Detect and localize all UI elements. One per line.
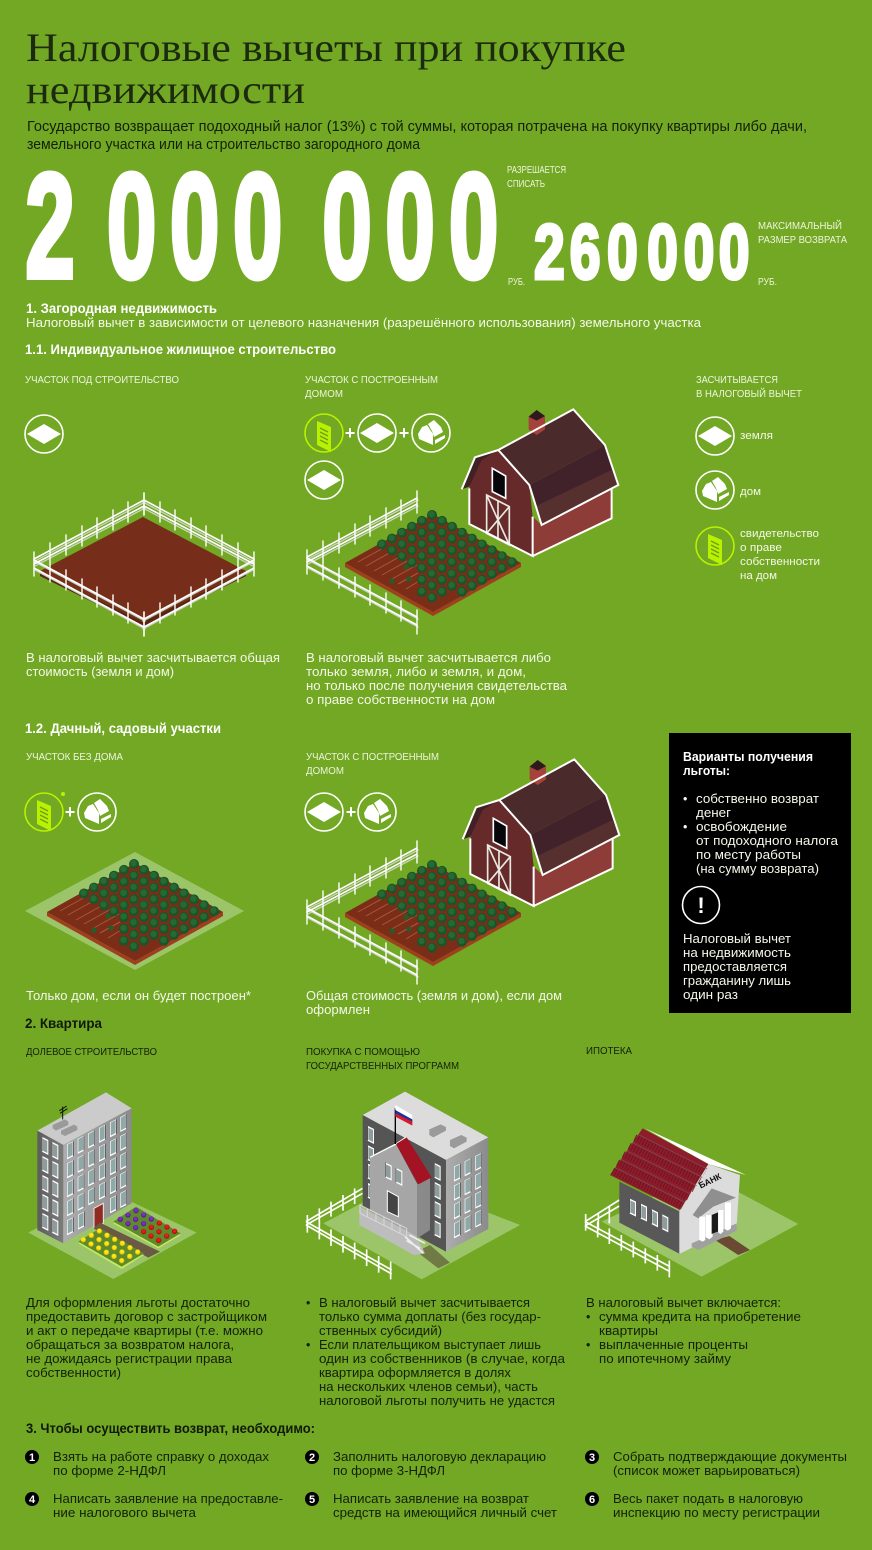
icons: document plus house (25, 792, 116, 831)
callout: benefit options: Налоговый вычет (683, 932, 791, 946)
intro text (27, 118, 807, 153)
text block: только сумма доплаты (без государ- (319, 1310, 541, 1324)
panel: dacha plot with built house: ДОМОМ (306, 766, 344, 777)
step 5: Написать заявление на возврат (333, 1492, 529, 1506)
step 4 (25, 1492, 283, 1520)
text block: но только после получения свидетельства (306, 679, 567, 693)
text block: выплаченные проценты (599, 1338, 748, 1352)
step 5: 5 (309, 1494, 315, 1506)
step 5: средств на имеющийся личный счет (333, 1506, 557, 1520)
text block: один из собственников (в случае, когда (319, 1352, 565, 1366)
big number: 260 000: РАЗМЕР ВОЗВРАТА (758, 235, 847, 246)
text block: Для оформления льготы достаточно (26, 1296, 250, 1310)
heading: section 3: 3. Чтобы осуществить возврат, необходимо: (26, 1420, 315, 1436)
text block (26, 1296, 267, 1380)
heading: section 1.2: 1.2. Дачный, садовый участки (25, 720, 221, 736)
panel: legend (696, 375, 820, 582)
text block (306, 651, 567, 707)
illustration: fenced empty plot (34, 493, 254, 636)
heading: section 1: 1. Загородная недвижимость (26, 300, 217, 316)
intro text: Государство возвращает подоходный налог (13%) с той суммы, которая потрачена на покупку квартиры либо дачи, (27, 118, 807, 135)
text block: квартиры (599, 1324, 658, 1338)
icons: document plus land plus house, or land: + (345, 423, 355, 443)
step 2: 2 (309, 1452, 315, 1464)
panel: legend: дом (740, 486, 761, 498)
step 1: по форме 2-НДФЛ (53, 1464, 166, 1478)
panel: mortgage: ИПОТЕКА (586, 1046, 632, 1057)
text block: обращаться за возвратом налога, (26, 1338, 234, 1352)
big number: 2 000 000: 2 000 000 (25, 144, 499, 310)
text block (306, 1296, 565, 1408)
text block: только земля, либо и земля, и дом, (306, 665, 526, 679)
text block: В налоговый вычет засчитывается (319, 1296, 530, 1310)
text block: • (586, 1338, 590, 1352)
text block (586, 1296, 801, 1366)
big number: 2 000 000: РАЗРЕШАЕТСЯ (507, 165, 566, 176)
panel: legend: свидетельство (740, 528, 819, 540)
big number: 260 000: 260 000 (534, 211, 749, 296)
panel: legend: В НАЛОГОВЫЙ ВЫЧЕТ (696, 387, 802, 400)
text block: стоимость (земля и дом) (26, 665, 174, 679)
illustration: government building with flag (306, 1092, 520, 1279)
text block: на нескольких членов семьи), часть (319, 1380, 538, 1394)
callout: benefit options: один раз (683, 988, 738, 1002)
panel: plot without a house (25, 752, 251, 1003)
text block: предоставить договор с застройщиком (26, 1310, 267, 1324)
icons: document plus land plus house, or land (305, 414, 450, 499)
step 6: Весь пакет подать в налоговую (613, 1492, 803, 1506)
panel: plot without a house: УЧАСТОК БЕЗ ДОМА (26, 752, 123, 763)
callout: benefit options: денег (696, 806, 731, 820)
step 1: Взять на работе справку о доходах (53, 1450, 270, 1464)
heading: section 1: Налоговый вычет в зависимости от целевого назначения (разрешённого использования) земельного участка (26, 316, 701, 330)
callout: benefit options: по месту работы (696, 848, 801, 862)
step 2: по форме 3-НДФЛ (333, 1464, 445, 1478)
illustration: apartment block with flower beds (28, 1092, 197, 1279)
text block: В налоговый вычет засчитывается либо (306, 651, 551, 665)
callout: benefit options: льготы: (683, 764, 730, 778)
callout: benefit options (669, 733, 851, 1013)
panel: legend: ЗАСЧИТЫВАЕТСЯ (696, 375, 778, 386)
illustration: bank building: БАНК (697, 1171, 723, 1190)
icon: exclamation: ! (697, 893, 705, 918)
text block: ственных субсидий) (319, 1324, 442, 1338)
step 1 (25, 1450, 270, 1478)
step 3: 3 (589, 1452, 595, 1464)
panel: mortgage (585, 1046, 801, 1366)
icons: land plus house: + (346, 802, 356, 822)
text block: сумма кредита на приобретение (599, 1310, 801, 1324)
step 3: Собрать подтверждающие документы (613, 1450, 847, 1464)
callout: benefit options: (на сумму возврата) (696, 862, 819, 876)
callout: benefit options: Варианты получения (683, 750, 813, 764)
text block: оформлен (306, 1003, 370, 1017)
text block (306, 989, 562, 1017)
panel: legend: собственности (740, 556, 820, 568)
illustration: bank building (585, 1128, 798, 1277)
heading: section 2: 2. Квартира (25, 1015, 102, 1031)
text block: по ипотечному займу (599, 1352, 732, 1366)
text block: • (306, 1296, 310, 1310)
step 4: ние налогового вычета (53, 1506, 196, 1520)
heading: section 1 (26, 300, 701, 330)
big number: 2 000 000: РУБ. (508, 277, 525, 288)
text block: Общая стоимость (земля и дом), если дом (306, 989, 562, 1003)
heading: section 1.1: 1.1. Индивидуальное жилищное строительство (25, 341, 336, 357)
callout: benefit options: • (683, 792, 687, 806)
callout: benefit options: освобождение (696, 820, 787, 834)
step 4: 4 (29, 1494, 36, 1506)
callout: benefit options: гражданину лишь (683, 974, 791, 988)
step 6: инспекцию по месту регистрации (613, 1506, 820, 1520)
step 6: 6 (589, 1494, 595, 1506)
panel: state programs: ПОКУПКА С ПОМОЩЬЮ (306, 1047, 420, 1058)
intro text: земельного участка или на строительство загородного дома (27, 136, 421, 153)
panel: plot with built house: ДОМОМ (305, 389, 343, 400)
title (26, 25, 626, 112)
big number: 260 000: МАКСИМАЛЬНЫЙ (758, 219, 842, 232)
text block: о праве собственности на дом (306, 693, 495, 707)
big number: 260 000 (534, 211, 847, 296)
panel: plot for construction: УЧАСТОК ПОД СТРОИТЕЛЬСТВО (25, 375, 179, 386)
text block: квартира оформляется в долях (319, 1366, 512, 1380)
text block: В налоговый вычет включается: (586, 1296, 781, 1310)
text block: • (586, 1310, 590, 1324)
panel: state programs (306, 1047, 565, 1408)
panel: shared construction: ДОЛЕВОЕ СТРОИТЕЛЬСТВО (26, 1047, 157, 1058)
step 3: (список может варьироваться) (613, 1464, 800, 1478)
text block: Только дом, если он будет построен* (26, 989, 251, 1003)
panel: legend: на дом (740, 570, 777, 582)
step 4: Написать заявление на предоставле- (53, 1492, 283, 1506)
callout: benefit options: собственно возврат (696, 792, 819, 806)
callout: benefit options: от подоходного налога (696, 834, 838, 848)
illustration: barn with garden and fence (307, 409, 618, 634)
text block (26, 651, 280, 679)
icons: document plus house: + (65, 802, 75, 822)
illustration: garden on lawn (25, 852, 244, 970)
text block: и акт о передаче квартиры (т.е. можно (26, 1324, 263, 1338)
callout: benefit options: на недвижимость (683, 946, 791, 960)
text block: не дожидаясь регистрации права (26, 1352, 232, 1366)
text block: Если плательщиком выступает лишь (319, 1338, 541, 1352)
panel: state programs: ГОСУДАРСТВЕННЫХ ПРОГРАММ (306, 1061, 459, 1072)
panel: dacha plot with built house: УЧАСТОК С ПОСТРОЕННЫМ (306, 752, 439, 763)
illustration: barn with garden and fence (307, 759, 619, 984)
step 1: 1 (29, 1452, 35, 1464)
step 6 (585, 1492, 820, 1520)
step 2: Заполнить налоговую декларацию (333, 1450, 546, 1464)
panel: plot for construction (25, 375, 280, 679)
text block: собственности) (26, 1366, 121, 1380)
text block: налоговой льготы получить не удастся (319, 1394, 555, 1408)
panel: plot with built house (305, 375, 618, 707)
panel: plot with built house: УЧАСТОК С ПОСТРОЕННЫМ (305, 375, 438, 386)
big number: 2 000 000: СПИСАТЬ (507, 179, 545, 190)
callout: benefit options: • (683, 820, 687, 834)
text block: В налоговый вычет засчитывается общая (26, 651, 280, 665)
panel: legend: земля (740, 430, 773, 442)
panel: legend: о праве (740, 542, 782, 554)
icon: exclamation (682, 886, 720, 924)
step 5 (305, 1492, 557, 1520)
icons: document plus land plus house, or land: + (399, 423, 409, 443)
title: недвижимости (26, 67, 305, 112)
step 2 (305, 1450, 546, 1478)
panel: shared construction (26, 1047, 267, 1380)
callout: benefit options: предоставляется (683, 960, 787, 974)
big number: 260 000: РУБ. (758, 277, 777, 288)
panel: dacha plot with built house (305, 752, 619, 1017)
step 3 (585, 1450, 847, 1478)
icons: land plus house (305, 793, 396, 831)
text block: • (306, 1338, 310, 1352)
icon: land (25, 415, 63, 453)
title: Налоговые вычеты при покупке (26, 25, 626, 70)
